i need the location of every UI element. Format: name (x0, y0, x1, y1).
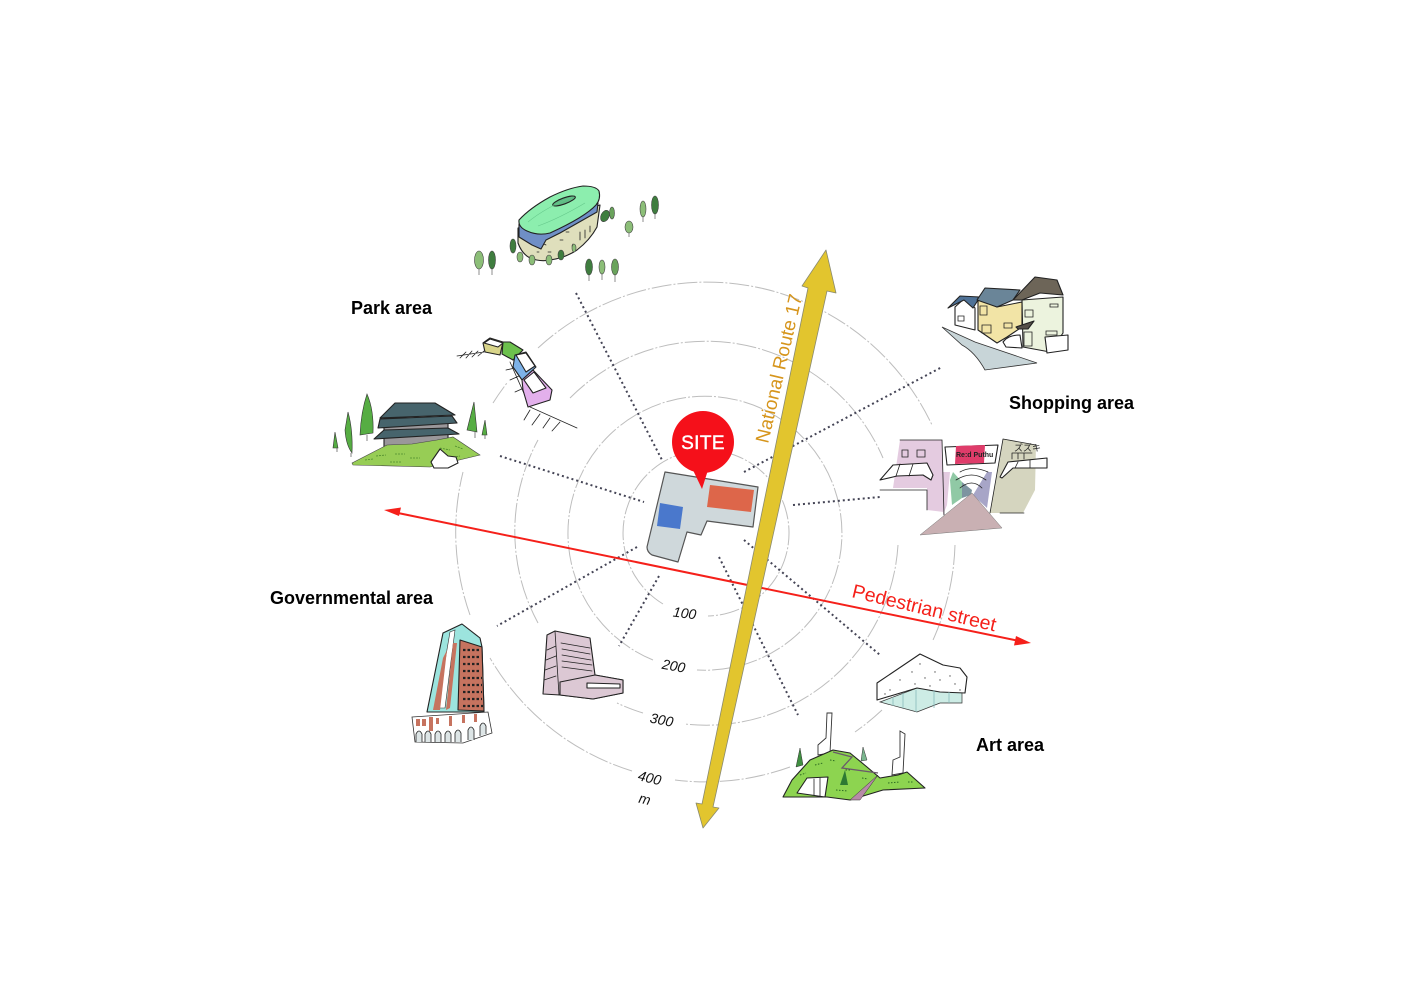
label: park area: Park area (351, 298, 433, 318)
icon: pink office building (543, 631, 623, 699)
label: governmental area: Governmental area (270, 588, 434, 608)
icon: train on curved track (457, 338, 577, 431)
distance rings (456, 282, 955, 782)
icon: shopping arcade: Re:d Puthu (956, 452, 993, 459)
distance labels: 200 (660, 656, 687, 676)
icon: green mound with chimneys (783, 713, 925, 800)
icon: white perforated gallery (877, 654, 967, 712)
distance labels: 400 (637, 767, 663, 788)
pedestrian street arrow (384, 508, 1031, 646)
dotted connectors (497, 293, 942, 715)
national route arrow (696, 250, 836, 828)
label: shopping area: Shopping area (1009, 393, 1135, 413)
blue building (657, 503, 683, 529)
distance labels (637, 604, 697, 808)
icon: stadium with trees (474, 186, 658, 282)
distance labels: m (637, 790, 653, 808)
site plan (647, 472, 758, 562)
icon: shopping arcade: ズズキ (1014, 442, 1041, 453)
pedestrian street arrow: Pedestrian street (850, 580, 999, 636)
red building (707, 485, 754, 512)
trees (474, 196, 658, 282)
national route arrow: National Route 17 (752, 292, 807, 445)
icon: government tower (412, 624, 492, 743)
icon: shopping arcade (880, 439, 1047, 535)
site marker: SITE (681, 433, 725, 454)
icon: houses along a street (942, 277, 1068, 370)
icon: japanese castle on hill (333, 394, 487, 468)
site marker (672, 411, 734, 489)
distance labels: 100 (672, 604, 697, 622)
distance labels: 300 (649, 710, 675, 730)
label: art area: Art area (976, 735, 1045, 755)
